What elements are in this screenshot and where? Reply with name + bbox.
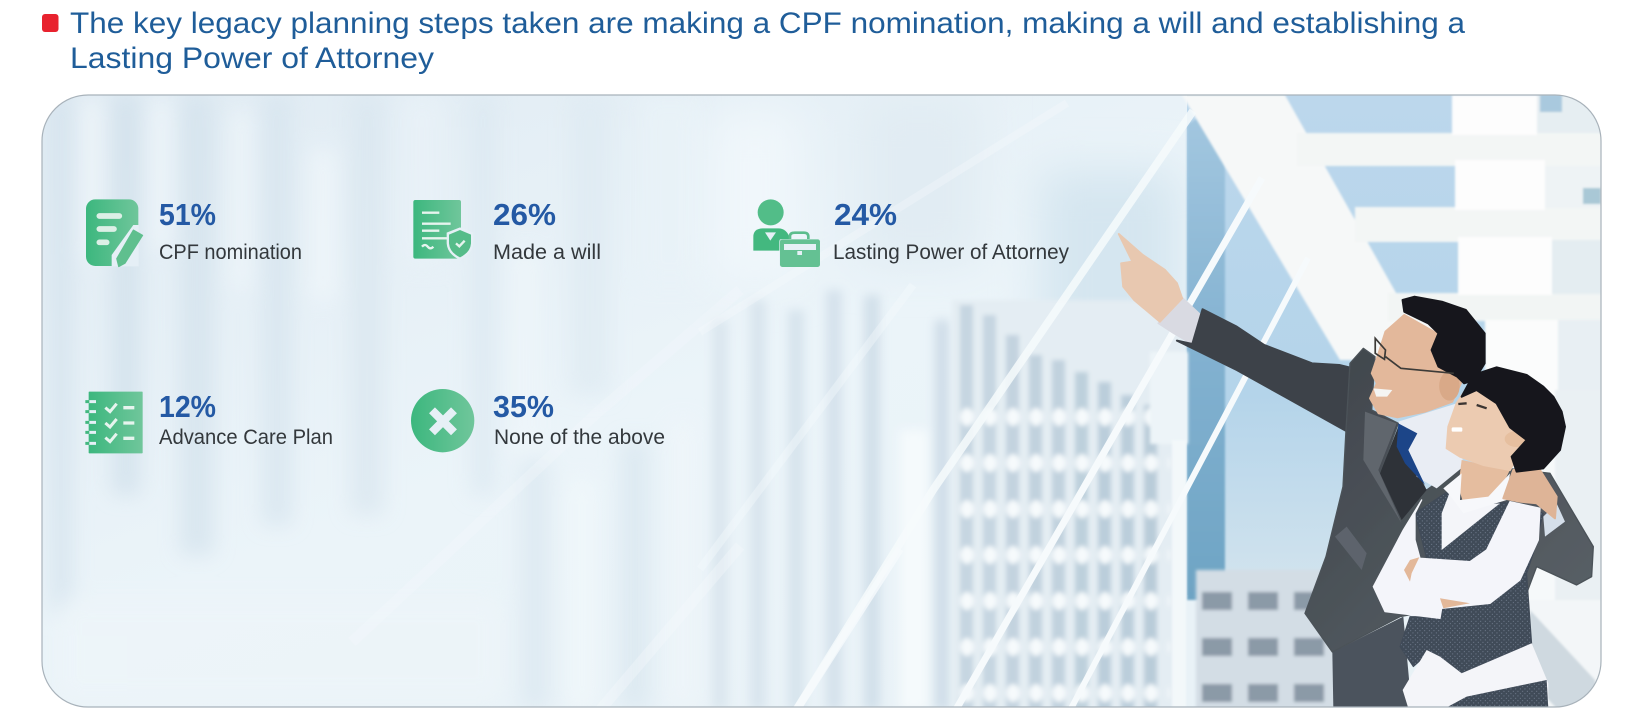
boy face bbox=[1447, 388, 1529, 470]
man shirt and tie bbox=[1397, 403, 1463, 488]
stat: 12% Advance Care Plan: 12% bbox=[159, 389, 216, 424]
stat: 24% Lasting Power of Attorney bbox=[753, 197, 1069, 267]
title bbox=[70, 7, 1465, 75]
jacket lapel bbox=[1363, 412, 1402, 523]
pointing hand and cuff bbox=[1119, 234, 1203, 344]
man jacket body bbox=[1305, 348, 1593, 652]
boy trousers bbox=[1445, 680, 1548, 708]
mid building strips right with windows bbox=[956, 300, 1168, 706]
boy lower shirt bbox=[1403, 643, 1548, 708]
stat: 35% None of the above: 35% bbox=[493, 389, 554, 424]
boy hair bbox=[1462, 367, 1565, 472]
mid pale haze behind tower bbox=[730, 130, 1186, 300]
stat: 51% CPF nomination: CPF nomination bbox=[159, 241, 302, 264]
stat: 12% Advance Care Plan bbox=[85, 389, 333, 453]
figures: father and son, body bbox=[1305, 297, 1593, 708]
stat: 26% Made a will bbox=[413, 197, 601, 264]
icon: checklist notebook bbox=[85, 392, 143, 453]
stat: 35% None of the above: None of the above bbox=[494, 426, 665, 449]
stat: 51% CPF nomination: 51% bbox=[159, 197, 216, 232]
diagonal white bridge cables bbox=[352, 103, 1308, 718]
stat: 26% Made a will: 26% bbox=[493, 197, 556, 232]
jacket inner shadow bbox=[1380, 427, 1427, 520]
mid building strips left bbox=[712, 290, 949, 710]
stat: 24% Lasting Power of Attorney: Lasting Power of Attorney bbox=[833, 241, 1069, 264]
boy hands bbox=[1404, 557, 1470, 608]
boy crossed arms bbox=[1373, 500, 1540, 618]
title: The key legacy planning steps taken are making a CPF nomination, making a will and establishing a bbox=[70, 7, 1465, 40]
right sky, glass tower and lower building bbox=[1150, 95, 1607, 712]
bullet: red square bbox=[42, 14, 58, 32]
stat: 12% Advance Care Plan: Advance Care Plan bbox=[159, 426, 333, 449]
figures: father and son, upper part bbox=[1118, 233, 1350, 432]
left faded building strips bbox=[50, 95, 700, 710]
stat: 51% CPF nomination bbox=[86, 197, 302, 267]
white bridge structure and distant windows bbox=[1182, 95, 1610, 712]
icon: cross in circle bbox=[411, 389, 474, 452]
jacket pocket flap bbox=[1335, 527, 1367, 570]
icon: person with briefcase bbox=[753, 199, 820, 267]
boy neck and collar bbox=[1443, 460, 1510, 507]
man jacket arm bbox=[1177, 309, 1374, 440]
stat: 26% Made a will: Made a will bbox=[493, 241, 601, 264]
boy vest bbox=[1400, 490, 1543, 673]
man's far sleeve cuff bbox=[1543, 503, 1565, 537]
man trousers bbox=[1332, 617, 1412, 708]
stat: 35% None of the above bbox=[411, 389, 665, 452]
icon: document with shield bbox=[413, 200, 473, 260]
man face and hair bbox=[1370, 297, 1485, 417]
icon: form and pencil bbox=[86, 199, 143, 267]
stat: 24% Lasting Power of Attorney: 24% bbox=[834, 197, 897, 232]
man hand on shoulder bbox=[1503, 470, 1557, 518]
boy shirt placket bbox=[1442, 492, 1500, 550]
title: Lasting Power of Attorney bbox=[70, 42, 434, 75]
